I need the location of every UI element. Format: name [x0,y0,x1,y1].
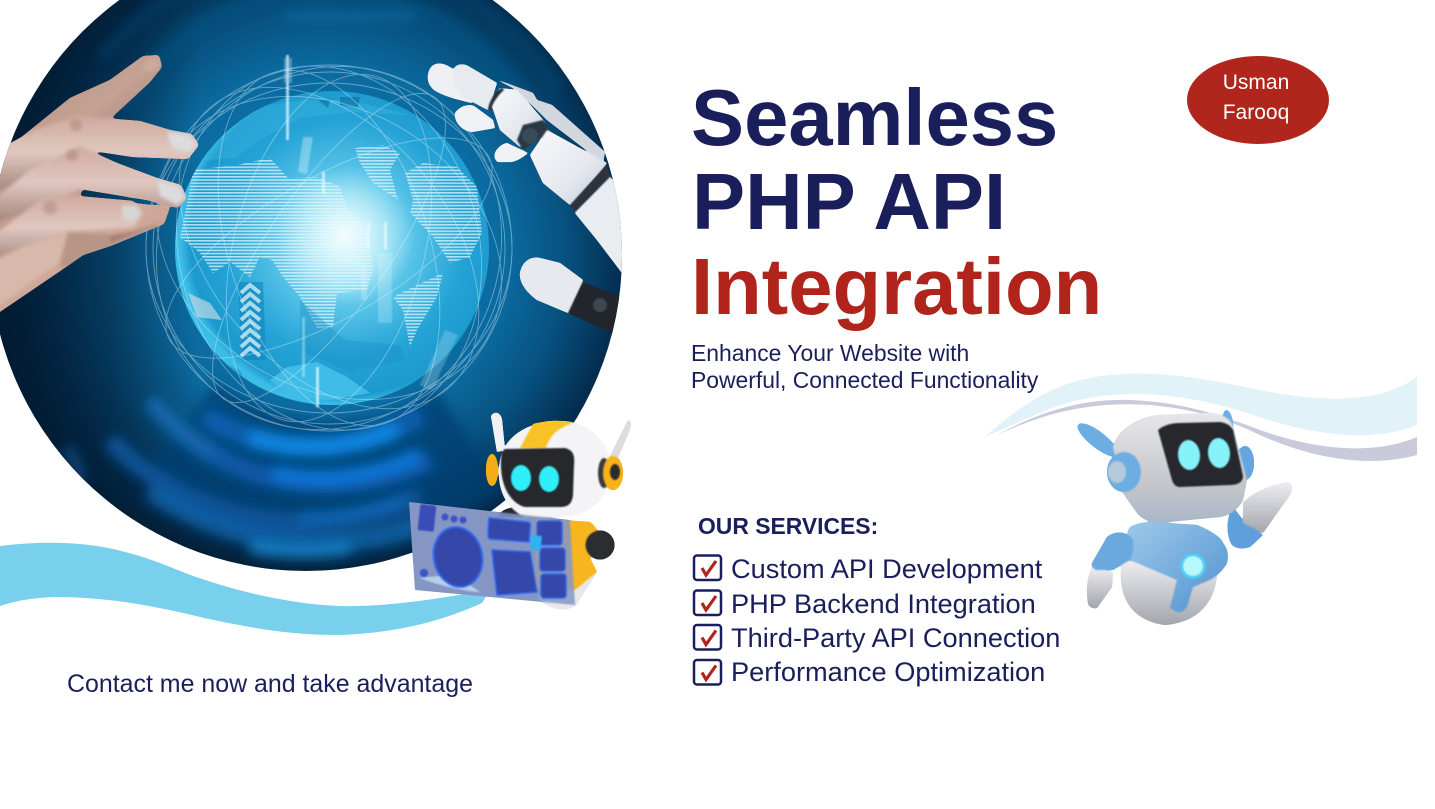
antennas [491,413,631,460]
title: PHP API [692,157,1006,246]
blue robot mascot [1073,409,1292,625]
title: Seamless [691,73,1058,162]
light wave decoration [985,374,1417,461]
world globe [170,90,500,410]
contact call to action: Contact me now and take advantage [67,670,473,698]
yellow robot mascot [409,413,631,609]
right arm [1228,482,1292,548]
chevron arrow [241,285,260,356]
holographic panel [409,502,575,605]
cyan wave [0,543,490,635]
torso [1121,522,1228,625]
subtitle: Powerful, Connected Functionality [691,367,1039,393]
network orbit lines [146,64,512,432]
subtitle: Enhance Your Website with [691,340,969,366]
antennas [1073,409,1235,462]
author badge: Usman [1223,71,1289,94]
services heading: OUR SERVICES: [698,513,878,539]
head [1107,413,1247,523]
subtitle [691,340,1039,393]
right ear [1236,446,1254,480]
hero image: globe with human and robot hands [0,0,642,580]
service: PHP backend integration: PHP Backend Integration [731,588,1036,619]
author badge: Farooq [1223,101,1289,124]
services list [694,553,1060,687]
left arm [1087,532,1133,608]
service: custom API development: Custom API Development [731,553,1043,584]
title: Integration [691,242,1102,331]
robot hand [428,64,622,333]
glowing rings at bottom of hero [67,400,470,552]
service: performance optimization: Performance Optimization [731,656,1045,687]
head [486,421,623,517]
light streaks [284,55,458,407]
service: third-party API connection: Third-Party API Connection [731,622,1060,653]
author badge [1187,56,1329,144]
title [691,73,1102,331]
human hand [0,55,199,322]
